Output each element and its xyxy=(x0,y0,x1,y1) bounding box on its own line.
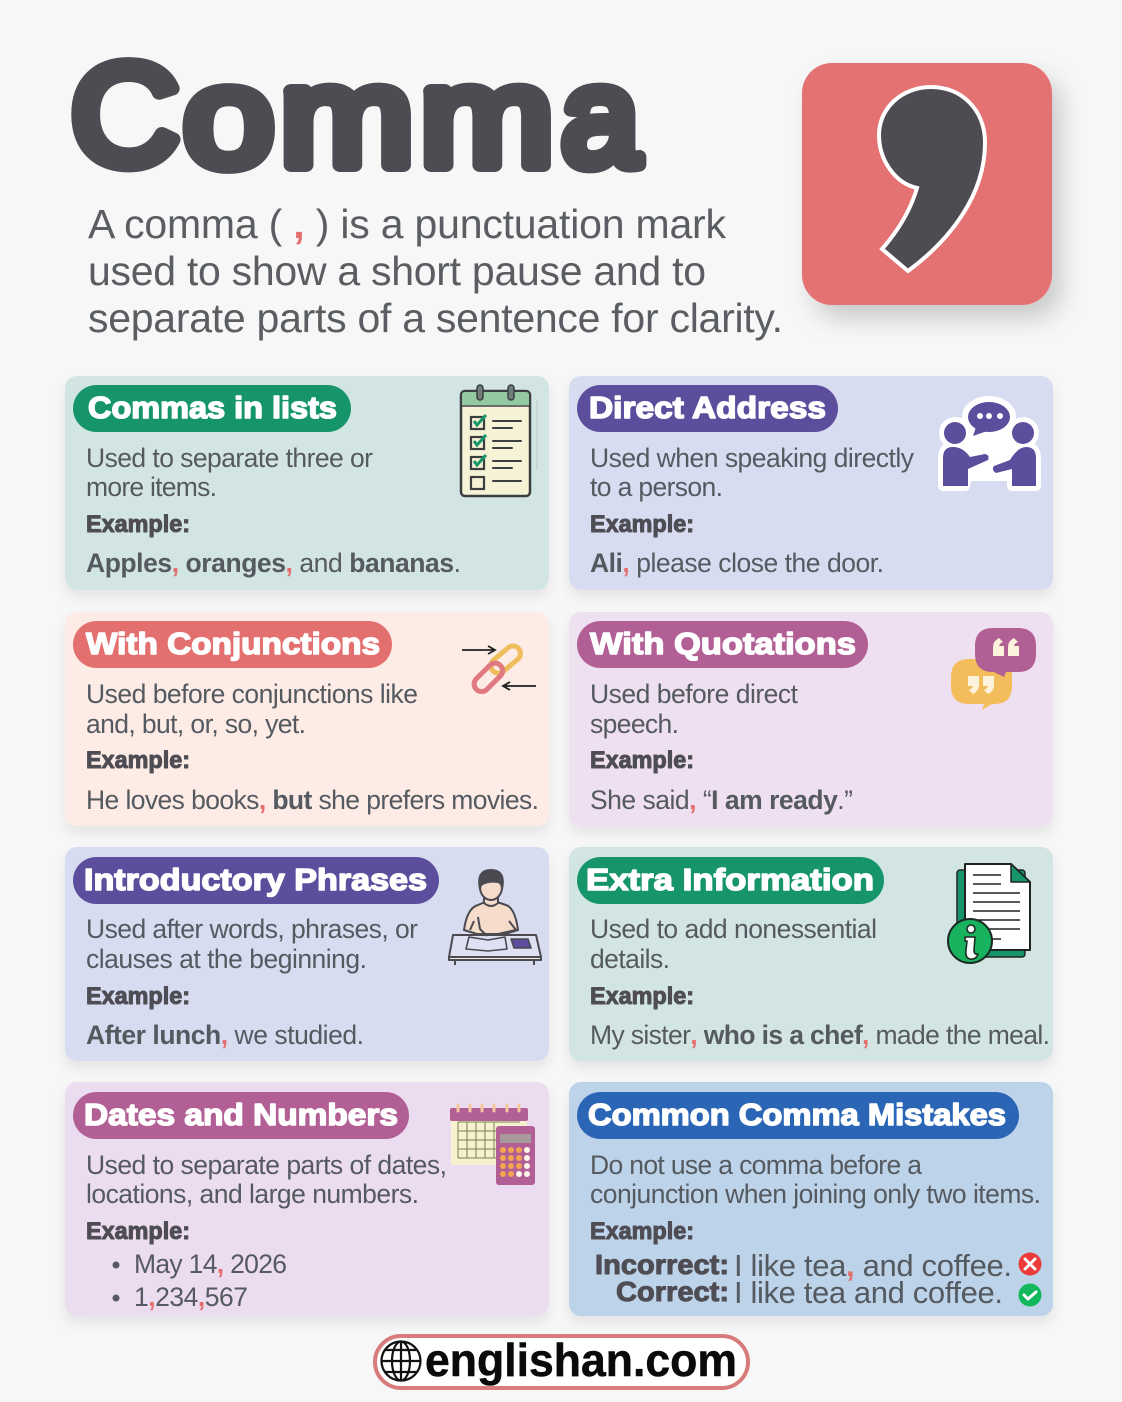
description xyxy=(590,914,877,974)
description: Used to separate three or xyxy=(86,443,373,473)
description: Used before conjunctions like xyxy=(86,679,418,709)
icon: document with info badge xyxy=(948,864,1030,963)
panel: introductory phrases xyxy=(65,847,549,1061)
example sentence: My sister, who is a chef, made the meal. xyxy=(590,1020,1050,1050)
icon: green check xyxy=(1018,1284,1042,1306)
example sentence: Ali, please close the door. xyxy=(590,548,884,578)
heading pill: Direct Address xyxy=(589,390,826,425)
description: Used when speaking directly xyxy=(590,443,915,473)
heading pill xyxy=(577,385,838,432)
correct example xyxy=(616,1275,1003,1310)
description xyxy=(86,679,418,739)
heading pill xyxy=(73,621,392,668)
icon: red cross xyxy=(1018,1252,1042,1276)
example label: Example: xyxy=(86,983,190,1010)
heading pill: Introductory Phrases xyxy=(84,862,427,897)
panel: dates and numbers xyxy=(65,1082,549,1316)
example label: Example: xyxy=(590,747,694,774)
description: conjunction when joining only two items. xyxy=(590,1179,1041,1209)
description xyxy=(86,443,373,502)
incorrect example: I like tea, and coffee. xyxy=(734,1248,1012,1283)
description xyxy=(86,914,418,974)
intro text: used to show a short pause and to xyxy=(88,248,706,294)
heading pill: Dates and Numbers xyxy=(84,1097,398,1132)
example sentence: She said, “I am ready.” xyxy=(590,785,853,815)
title: m xyxy=(280,38,414,195)
heading pill xyxy=(73,1092,409,1139)
example label: Example: xyxy=(590,511,694,538)
heading pill xyxy=(73,857,439,904)
example label: Example: xyxy=(590,983,694,1010)
icon: checklist xyxy=(461,385,537,496)
heading pill xyxy=(577,857,884,904)
example sentence: After lunch, we studied. xyxy=(86,1020,364,1050)
correct example: Correct: xyxy=(616,1276,729,1307)
description: clauses at the beginning. xyxy=(86,944,367,974)
panel: common comma mistakes xyxy=(569,1082,1053,1316)
description: and, but, or, so, yet. xyxy=(86,709,306,739)
description: locations, and large numbers. xyxy=(86,1179,419,1209)
incorrect example xyxy=(595,1248,1012,1283)
icon: two people talking xyxy=(943,401,1036,486)
heading pill: Extra Information xyxy=(586,862,874,897)
heading pill: Common Comma Mistakes xyxy=(588,1097,1006,1132)
heading pill xyxy=(577,621,868,668)
icon: quotation bubbles xyxy=(951,628,1036,710)
incorrect example: Incorrect: xyxy=(595,1249,729,1280)
correct example: I like tea and coffee. xyxy=(734,1275,1003,1310)
example label: Example: xyxy=(86,747,190,774)
description: Used after words, phrases, or xyxy=(86,914,418,944)
example label: Example: xyxy=(86,511,190,538)
website text: englishan.com xyxy=(425,1334,737,1386)
example label: Example: xyxy=(86,1218,190,1245)
icon: student at desk xyxy=(449,870,541,965)
panel: extra information xyxy=(569,847,1053,1061)
intro text: A comma ( , ) is a punctuation mark xyxy=(88,201,726,247)
icon: chain links with arrows xyxy=(462,643,536,695)
description: speech. xyxy=(590,709,679,739)
description: more items. xyxy=(86,472,217,502)
panel: commas in lists xyxy=(65,376,549,590)
description: Used to separate parts of dates, xyxy=(86,1150,447,1180)
heading pill xyxy=(577,1092,1019,1139)
icon: globe xyxy=(382,1342,420,1380)
title: C xyxy=(71,36,179,195)
example list xyxy=(112,1249,287,1312)
description: Used before direct xyxy=(590,679,799,709)
description xyxy=(86,1150,447,1209)
title: o xyxy=(184,38,274,196)
description: Used to add nonessential xyxy=(590,914,877,944)
example label: Example: xyxy=(590,1218,694,1245)
example sentence: He loves books, but she prefers movies. xyxy=(86,785,539,815)
example list: 1,234,567 xyxy=(134,1282,248,1312)
heading pill: With Quotations xyxy=(590,626,856,661)
panel: direct address xyxy=(569,376,1053,590)
heading pill: With Conjunctions xyxy=(86,626,380,661)
icon: calendar and calculator xyxy=(450,1105,535,1185)
example sentence: Apples, oranges, and bananas. xyxy=(86,548,461,578)
heading pill xyxy=(73,385,351,432)
panel: with conjunctions xyxy=(65,612,549,826)
description xyxy=(590,443,915,502)
intro text: separate parts of a sentence for clarity. xyxy=(88,295,783,341)
title: a xyxy=(561,38,640,195)
description: Do not use a comma before a xyxy=(590,1150,922,1180)
icon: large comma tile xyxy=(802,63,1052,305)
intro text xyxy=(88,201,783,341)
panel: with quotations xyxy=(569,612,1053,826)
description: details. xyxy=(590,944,670,974)
footer: website badge xyxy=(375,1334,748,1388)
title: m xyxy=(420,38,554,195)
description xyxy=(590,679,799,739)
description xyxy=(590,1150,1041,1209)
heading pill: Commas in lists xyxy=(88,390,337,425)
description: to a person. xyxy=(590,472,723,502)
example list: May 14, 2026 xyxy=(134,1249,287,1279)
